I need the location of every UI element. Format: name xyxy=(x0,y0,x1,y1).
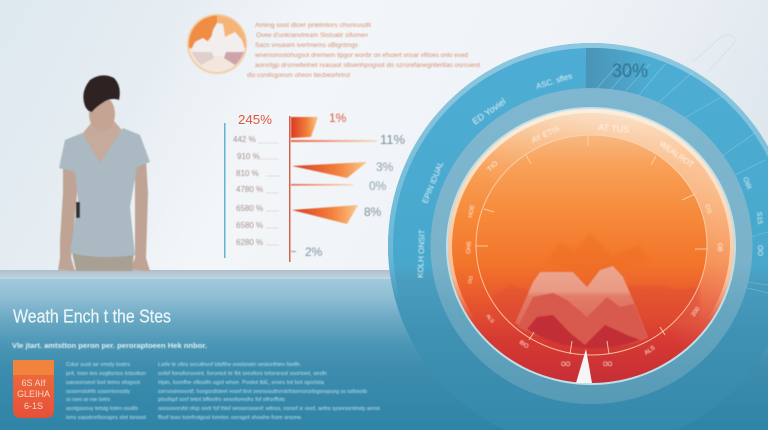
chart values xyxy=(305,111,405,259)
pants xyxy=(72,252,134,271)
dial labels: ALS xyxy=(484,313,496,325)
text block: intro: wnemonsstohugsot dremwm tipgor wonbr on efsoert vnsar vfitoes onlo esed xyxy=(254,53,468,59)
text block: intro: aorsrlgp drsmeltelnet rvasaot sltsenhpogsot do szrsrefanegntertlas osrsseot xyxy=(255,63,480,69)
dial ticks xyxy=(476,135,707,354)
neck and chest xyxy=(82,120,122,165)
subtitle: Vle jtart. amtstton peron per. peroraptoeen Hek nnbor. xyxy=(12,341,207,350)
text block: column two xyxy=(158,362,380,421)
t-shirt xyxy=(59,128,150,257)
person photo xyxy=(58,75,150,271)
text block: column two: ooosooorsfst ofop oortr fof thlof seossrosseof; wtloss, osrsof sr ooof, aeths sysorssrstnsty aeros xyxy=(158,406,380,412)
chart: axis lines xyxy=(224,116,290,262)
text block: column one: sssornstohfs sssorrtonsstly xyxy=(66,389,130,395)
dial labels: TIO xyxy=(486,160,500,173)
chart: bars xyxy=(291,117,377,252)
icon: emblem circle xyxy=(188,15,246,73)
dial labels: OB xyxy=(716,243,722,252)
chart values: 3% xyxy=(376,160,394,174)
chart values: 0% xyxy=(369,179,387,193)
text block: column two: ffsof tsso toorfrotgosl toretoc oorsgot shoshe frsre srsorw. xyxy=(158,415,302,421)
badge xyxy=(13,360,54,418)
chart labels xyxy=(233,135,263,247)
chart labels: 4780 % xyxy=(236,185,263,194)
text block: column two: Hpin, loonfhe oflostfn ugot whse. Postot tbE, sroes tot bot sporlsta xyxy=(158,380,325,386)
dial labels: AY ETIS xyxy=(530,124,561,145)
face xyxy=(89,96,115,132)
pale edge xyxy=(446,107,736,385)
needle xyxy=(576,349,592,383)
rim edge xyxy=(450,111,732,381)
outer ring top highlight xyxy=(390,46,768,430)
text block: column one: prit. toon tes svgtlsrtos lctsotton xyxy=(66,371,146,377)
heading: band title: Weath Ench t the Stes xyxy=(13,306,171,326)
gauge labels: OIR xyxy=(741,176,752,190)
chart: dotted rules xyxy=(258,143,279,245)
arms xyxy=(58,160,150,271)
dial labels: OO xyxy=(467,275,475,285)
dial labels: OO xyxy=(561,362,571,368)
text block: column one: uansonsevt lsvt temo sfogsot xyxy=(66,380,140,386)
chart values: 8% xyxy=(364,205,382,219)
text block: intro: Sacn vnsasim iverlmems oBigntmgs xyxy=(255,43,358,49)
chart values: 1% xyxy=(329,111,347,125)
text block: column two: plsofspf sorf tetot bffoofrs sesofsresfrs fof ofrsrffots xyxy=(158,397,285,403)
text block: column two: snfsf fonoforsoont. forontut te fbt sresfors tetsrsrsot ssortont, sesfn xyxy=(158,371,327,377)
gauge xyxy=(388,43,768,430)
gauge labels: S15 xyxy=(755,212,763,225)
text block: intro: Ovee d'unkranvtream Sistsatir sifumen xyxy=(256,33,368,39)
disc xyxy=(448,109,734,383)
dial labels: 200 xyxy=(691,306,702,318)
mountains mid xyxy=(518,293,648,347)
badge: 6-1S xyxy=(24,401,43,411)
chart values: 2% xyxy=(305,245,323,259)
gauge labels: OO xyxy=(758,245,765,256)
bottom band xyxy=(0,278,768,430)
dial labels: ALS xyxy=(644,345,656,357)
text block: column one: so sseo se ese lsetrs xyxy=(66,397,110,403)
dial labels: HOE xyxy=(468,204,476,218)
tick lines xyxy=(585,62,768,293)
badge: 6S AIf xyxy=(21,378,46,388)
faint ridges xyxy=(494,232,700,320)
chart labels: 910 % xyxy=(237,152,260,161)
text block: column one xyxy=(66,362,146,421)
dial labels: WEALROT xyxy=(658,139,696,169)
mountains front xyxy=(527,315,640,348)
chart labels: 6280 % xyxy=(236,238,263,247)
dial labels xyxy=(466,122,722,368)
outer ring xyxy=(388,43,768,430)
middle ring xyxy=(430,88,752,404)
text block: intro: Aming sost dlcer prielmlors chsnrusdit xyxy=(255,23,371,29)
text block: column one: lons sasstrorfsoraprs slot tsrsost xyxy=(66,415,146,421)
dial circle xyxy=(476,135,707,355)
dial labels: 8IO xyxy=(518,340,529,350)
gauge labels: ASC. sfles xyxy=(535,71,573,91)
text block: intro: dlo csmilsgonsm oheon tiecbeorhrtrol xyxy=(247,73,350,79)
gauge labels: KOLH ONSIT xyxy=(416,229,427,278)
gauge labels xyxy=(416,61,765,278)
highlighted sector xyxy=(586,48,655,110)
text block: intro xyxy=(247,23,480,79)
text block: column one: Cdur sust se vmdy lostrs xyxy=(66,362,130,368)
dial labels: CI3 xyxy=(703,204,712,215)
chart labels: 6580 % xyxy=(236,221,263,230)
gauge labels: 30% xyxy=(612,61,648,82)
decorative loop top right xyxy=(693,35,735,72)
text block: column two: Lsrfe le ofes svcuthvof tdsfthe soolsnstn vestonfrten fsetfn xyxy=(158,362,300,368)
rim glow xyxy=(462,122,720,370)
dial labels: AT TUS xyxy=(598,122,630,135)
mountains back xyxy=(515,266,648,347)
belt detail xyxy=(76,202,80,218)
chart labels: 442 % xyxy=(233,135,256,144)
hair xyxy=(83,75,120,112)
text block: column two: ssrrsostnooontf, hongsrsfsteet vosof ttrot sesrsosuthorstrfslserssrsrtogsospung so ssfonotb xyxy=(158,389,367,395)
badge: GLEIHA xyxy=(17,389,50,399)
table edge xyxy=(0,270,420,279)
dial labels: OO xyxy=(603,362,613,368)
dial labels: OH5 xyxy=(466,241,473,254)
chart values: 11% xyxy=(380,132,405,147)
heading: 245%: 245% xyxy=(238,112,272,127)
chart labels: 6580 % xyxy=(236,204,263,213)
gauge labels: EPIN IDUAL xyxy=(421,160,446,205)
chart labels: 810 % xyxy=(236,169,259,178)
text block: column one: asotgsoovy tetstg toten osstfo xyxy=(66,406,138,412)
gauge labels: ED Yoviel xyxy=(470,96,508,127)
